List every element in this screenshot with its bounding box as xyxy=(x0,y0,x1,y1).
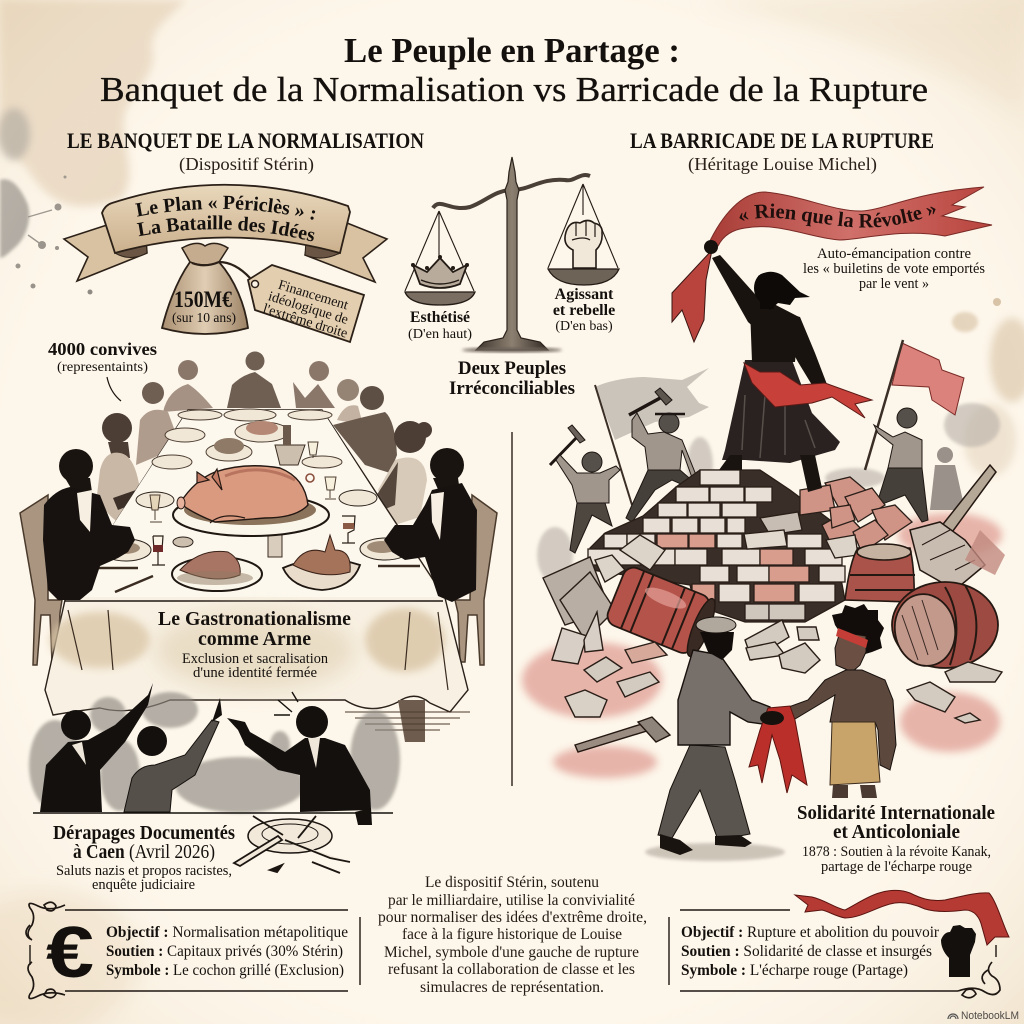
text: central explanation: par le milliardaire, utilise la convivialité xyxy=(388,892,635,909)
red flag xyxy=(865,340,964,470)
summary lines: Objectif : Rupture et abolition du pouvoir xyxy=(681,924,940,941)
caption: gastronationalisme: d'une identité fermée xyxy=(193,665,317,681)
man pointing xyxy=(227,692,372,825)
chairs xyxy=(20,495,497,665)
summary lines: Symbole : Le cochon grillé (Exclusion) xyxy=(106,962,344,979)
icon: money bag 150M€ xyxy=(162,243,250,334)
summary lines xyxy=(106,924,348,979)
caption: esthétisé: Esthétisé xyxy=(410,309,470,326)
banner: plan Périclès xyxy=(62,184,388,284)
text: auto-émancipation xyxy=(803,246,985,292)
icon: money bag 150M€: 150M€ xyxy=(174,287,232,312)
center divider xyxy=(511,432,513,786)
caption: gastronationalisme: comme Arme xyxy=(198,628,311,650)
summary lines: Soutien : Capitaux privés (30% Stérin) xyxy=(106,943,343,960)
text: central explanation: Le dispositif Stérin, soutenu xyxy=(425,874,599,891)
caption: dérapages: enquête judiciaire xyxy=(92,877,195,893)
front barrel xyxy=(889,582,998,671)
title xyxy=(100,31,928,109)
caption: gastronationalisme xyxy=(158,608,351,681)
label: 4000 convives: (representaints) xyxy=(57,360,148,375)
rifle worker silhouette xyxy=(930,447,965,510)
loose stones xyxy=(565,620,1002,723)
text: auto-émancipation: par le vent » xyxy=(859,276,929,292)
caption: dérapages: Saluts nazis et propos racistes, xyxy=(56,863,232,879)
tag: financement xyxy=(248,265,364,342)
panel: red banner xyxy=(672,186,992,344)
caption: dérapages xyxy=(53,823,235,893)
man saluting xyxy=(40,683,153,812)
caption: esthétisé xyxy=(408,309,472,342)
panel: left summary xyxy=(26,902,360,999)
icon: black fist xyxy=(941,925,976,977)
caption: agissant et rebelle: (D'en bas) xyxy=(555,319,613,334)
summary lines: Soutien : Solidarité de classe et insurgés xyxy=(681,943,932,960)
right rubble and beam xyxy=(910,465,1005,590)
woman saluting xyxy=(124,698,222,812)
smoke and background workers xyxy=(537,403,1000,583)
tag: financement: Financement xyxy=(276,278,350,313)
banner text: Le Plan « Périclès » : xyxy=(135,196,316,220)
caption: solidarité: et Anticoloniale xyxy=(833,822,960,843)
smoke crowd xyxy=(29,692,400,813)
title: Le Peuple en Partage : xyxy=(344,31,680,70)
worker with hammer, second xyxy=(626,388,698,522)
back guests xyxy=(136,352,397,473)
man with cap xyxy=(645,617,785,861)
Kanak man xyxy=(775,604,896,798)
banner text: « Rien que la Révolte » xyxy=(739,204,936,228)
ornament: left corners xyxy=(26,902,65,999)
illustration: Caen altercation xyxy=(29,683,400,825)
caption: agissant et rebelle: Agissant xyxy=(555,286,614,303)
caption: solidarité: partage de l'écharpe rouge xyxy=(821,859,972,875)
roast chicken xyxy=(283,535,360,590)
caption: solidarité: Solidarité Internationale xyxy=(797,803,995,824)
barricade bricks xyxy=(588,470,912,622)
illustration: barricade scene xyxy=(522,255,1005,861)
roast pig on platter xyxy=(173,466,329,536)
summary lines xyxy=(681,924,940,979)
caption: solidarité xyxy=(797,803,995,875)
tag: financement: idéologique de xyxy=(266,289,350,328)
title: Banquet de la Normalisation vs Barricade de la Rupture xyxy=(100,70,928,109)
heading: barricade column: (Héritage Louise Michel) xyxy=(688,154,877,175)
label: 4000 convives: 4000 convives xyxy=(48,339,157,359)
text: central explanation: pour normaliser des idées d'extrême droite, xyxy=(378,909,647,926)
heading: deux peuples: Irréconciliables xyxy=(449,379,575,399)
left barrel xyxy=(604,564,720,659)
text: central explanation xyxy=(378,874,647,996)
worker with hammer, far left xyxy=(550,425,620,553)
summary lines: Symbole : L'écharpe rouge (Partage) xyxy=(681,962,908,979)
tablecloth xyxy=(45,410,470,742)
caption: gastronationalisme: Exclusion et sacralisation xyxy=(182,651,329,667)
illustration: banquet scene xyxy=(20,352,497,742)
heading: banquet column: (Dispositif Stérin) xyxy=(179,154,314,175)
caption: solidarité: 1878 : Soutien à la révoite Kanak, xyxy=(802,844,991,860)
white flag xyxy=(595,368,709,505)
caption: dérapages: Dérapages Documentés xyxy=(53,823,235,844)
balance scale xyxy=(405,157,619,352)
dishes and glasses xyxy=(95,409,420,592)
text: central explanation: face à la figure historique de Louise xyxy=(402,926,622,943)
worker with flag xyxy=(874,408,928,522)
ornament: right corner xyxy=(958,962,1000,998)
icon: euro: € xyxy=(46,913,94,993)
ground washes xyxy=(522,513,1002,778)
icon: broken plate xyxy=(234,816,350,873)
red scarf handshake xyxy=(749,706,807,793)
scale post and beam xyxy=(433,157,590,352)
watermark: NotebookLM: NotebookLM xyxy=(961,1010,1019,1022)
right pan: fist xyxy=(548,184,619,285)
text: central explanation: refusant la collaboration de classe et les xyxy=(388,961,635,978)
caption: dérapages: à Caen (Avril 2026) xyxy=(73,842,215,863)
heading: barricade column xyxy=(630,128,934,175)
panel: right summary xyxy=(669,890,1009,998)
heading: deux peuples xyxy=(449,359,575,399)
ribbon: red scarf xyxy=(795,890,1009,945)
icon: money bag 150M€: (sur 10 ans) xyxy=(172,311,236,326)
text: auto-émancipation: Auto-émancipation contre xyxy=(817,246,971,262)
hammer on ground xyxy=(575,717,670,752)
left pan: crown xyxy=(405,211,475,305)
caption: gastronationalisme: Le Gastronationalisme xyxy=(158,608,351,630)
heading: banquet column xyxy=(67,128,424,175)
back barrel xyxy=(845,544,915,602)
banner: plan Périclès: La Bataille des Idées xyxy=(136,215,314,242)
caption: esthétisé: (D'en haut) xyxy=(408,327,472,342)
front-left guest in tuxedo xyxy=(43,449,135,600)
text: central explanation: Michel, symbole d'une gauche de rupture xyxy=(384,944,639,961)
label: 4000 convives xyxy=(48,339,157,401)
left rubble xyxy=(543,535,665,664)
text: central explanation: simulacres de représentation. xyxy=(420,979,604,996)
summary lines: Objectif : Normalisation métapolitique xyxy=(106,924,348,941)
Louise Michel figure xyxy=(712,255,872,492)
heading: barricade column: LA BARRICADE DE LA RUPTURE xyxy=(630,128,934,153)
text: auto-émancipation: les « builetins de vote emportés xyxy=(803,261,985,277)
caption: agissant et rebelle xyxy=(553,286,615,334)
heading: deux peuples: Deux Peuples xyxy=(458,359,566,379)
caption: agissant et rebelle: et rebelle xyxy=(553,302,615,319)
sliced roast xyxy=(172,551,262,591)
heading: banquet column: LE BANQUET DE LA NORMALISATION xyxy=(67,128,424,153)
front-right guest in tuxedo xyxy=(384,448,477,602)
tag: financement: l'extrême droite xyxy=(261,302,349,342)
left and right side guests xyxy=(97,413,432,525)
